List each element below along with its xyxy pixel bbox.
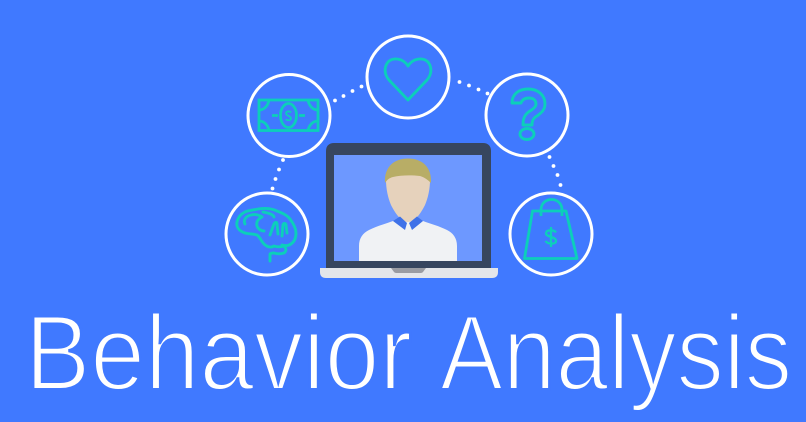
- person: [359, 158, 457, 261]
- hair: [385, 158, 431, 183]
- laptop notch: [391, 268, 426, 273]
- face: [386, 159, 430, 222]
- laptop screen: [334, 155, 482, 261]
- shirt: [359, 221, 457, 261]
- collar: [393, 216, 423, 230]
- icon: shopping bag: [510, 193, 592, 275]
- icon: brain: [226, 193, 308, 275]
- laptop frame: [326, 143, 491, 268]
- laptop base: [320, 268, 498, 278]
- icon: question mark: [486, 74, 568, 156]
- icon: money: [248, 74, 330, 156]
- title: [25, 292, 792, 412]
- title: Behavior: [25, 292, 412, 412]
- icon: heart: [367, 36, 449, 118]
- laptop: [320, 143, 498, 278]
- dotted connectors: [271, 80, 562, 190]
